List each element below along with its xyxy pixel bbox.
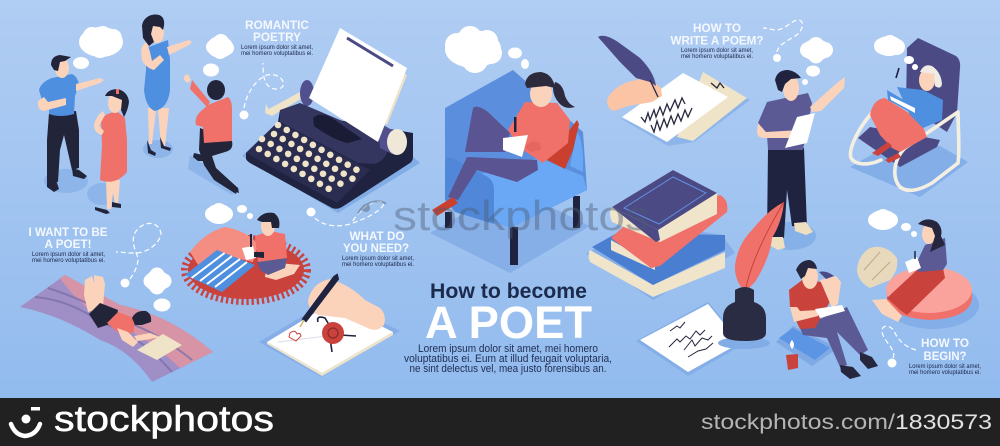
figure: man in blue shirt [38, 55, 104, 192]
illustration: stack of books [586, 170, 735, 300]
heading: romantic poetry: POETRY [253, 30, 301, 44]
illustration: armchair with reading woman [430, 70, 590, 273]
thought cloud: talking man [73, 26, 123, 69]
body text [404, 343, 612, 375]
dashed arrow: how to write a poem [763, 20, 802, 62]
heading: how to write a poem [670, 21, 764, 60]
logo icon [11, 407, 40, 436]
heading: how to begin: BEGIN? [924, 349, 966, 363]
heading: how to write a poem: HOW TO [693, 21, 741, 35]
heading: what do you need: YOU NEED? [343, 241, 409, 255]
figure: seated man with quill [776, 260, 878, 379]
title: how to become a poet: A POET [425, 297, 592, 348]
heading: how to write a poem: Lorem ipsum dolor sit amet, [681, 48, 753, 54]
illustration: man on red rug [185, 213, 307, 301]
heading: romantic poetry: Lorem ipsum dolor sit amet, [241, 45, 313, 51]
dashed arrow: what do you need [306, 201, 384, 226]
logo wordmark: stockphotos [54, 398, 274, 439]
illustration: typewriter [242, 28, 420, 213]
heading: what do you need: Lorem ipsum dolor sit amet, [342, 256, 414, 262]
footer bar [0, 398, 1000, 446]
image id url: stockphotos.com/ 1830573 [701, 411, 992, 434]
heading: i want to be a poet: A POET! [44, 237, 92, 251]
dashed arrow: i want to be a poet [116, 223, 161, 288]
illustration: woman in rocking chair [850, 38, 968, 197]
body text: Lorem ipsum dolor sit amet, mei homero [418, 343, 598, 355]
thought cloud: lying woman [144, 268, 172, 312]
heading: romantic poetry: mei homero voluptatibus ei. [241, 51, 313, 57]
illustration: inkwell with coral quill [636, 202, 784, 376]
illustration: feather and letter [598, 36, 750, 146]
figure: woman in coral dress [94, 89, 129, 214]
figure: standing man with paper [757, 70, 845, 250]
heading: romantic poetry: ROMANTIC [245, 18, 309, 32]
thought cloud: kneeling man [203, 34, 234, 76]
watermark: stockphotos [393, 192, 649, 239]
heading: how to begin: mei homero voluptatibus ei. [909, 370, 981, 376]
body text: voluptatibus ei. Eum at illud feugait voluptaria, [404, 353, 612, 365]
heading: i want to be a poet: mei homero voluptatibus ei. [32, 258, 105, 264]
heading: what do you need: WHAT DO [350, 229, 404, 243]
heading: how to write a poem: mei homero voluptatibus ei. [681, 54, 753, 60]
heading: how to begin [909, 336, 981, 376]
illustration: woman lying on blanket [20, 275, 213, 382]
illustration: hand sealing letter [259, 275, 400, 377]
heading: i want to be a poet: I WANT TO BE [28, 225, 108, 239]
figure: woman in blue dress [141, 14, 192, 156]
heading: what do you need [342, 229, 414, 268]
title: how to become a poet: How to become [430, 279, 587, 303]
heading: romantic poetry [241, 18, 313, 57]
heading: what do you need: mei homero voluptatibus ei. [342, 262, 414, 268]
heading: how to begin: Lorem ipsum dolor sit amet, [909, 364, 981, 370]
heading: how to begin: HOW TO [921, 336, 969, 350]
heading: i want to be a poet: Lorem ipsum dolor sit amet, [32, 252, 105, 258]
figure: woman on pouf [857, 219, 979, 329]
heading: i want to be a poet [28, 225, 108, 264]
thought cloud: standing man [800, 37, 833, 85]
scene: people talking [38, 14, 240, 214]
thought cloud: man on rug [205, 203, 253, 224]
figure: kneeling man [184, 74, 239, 194]
dashed arrow: romantic poetry [240, 63, 283, 120]
thought cloud: rocking chair [874, 35, 918, 70]
thought cloud: woman on pouf [868, 209, 917, 237]
body text: ne sint delectus vel, mea justo forensibus an. [410, 363, 606, 375]
title: how to become a poet [404, 279, 612, 375]
dashed arrow: how to begin [882, 326, 916, 368]
heading: how to write a poem: WRITE A POEM? [670, 34, 764, 48]
thought cloud: armchair [445, 26, 529, 73]
